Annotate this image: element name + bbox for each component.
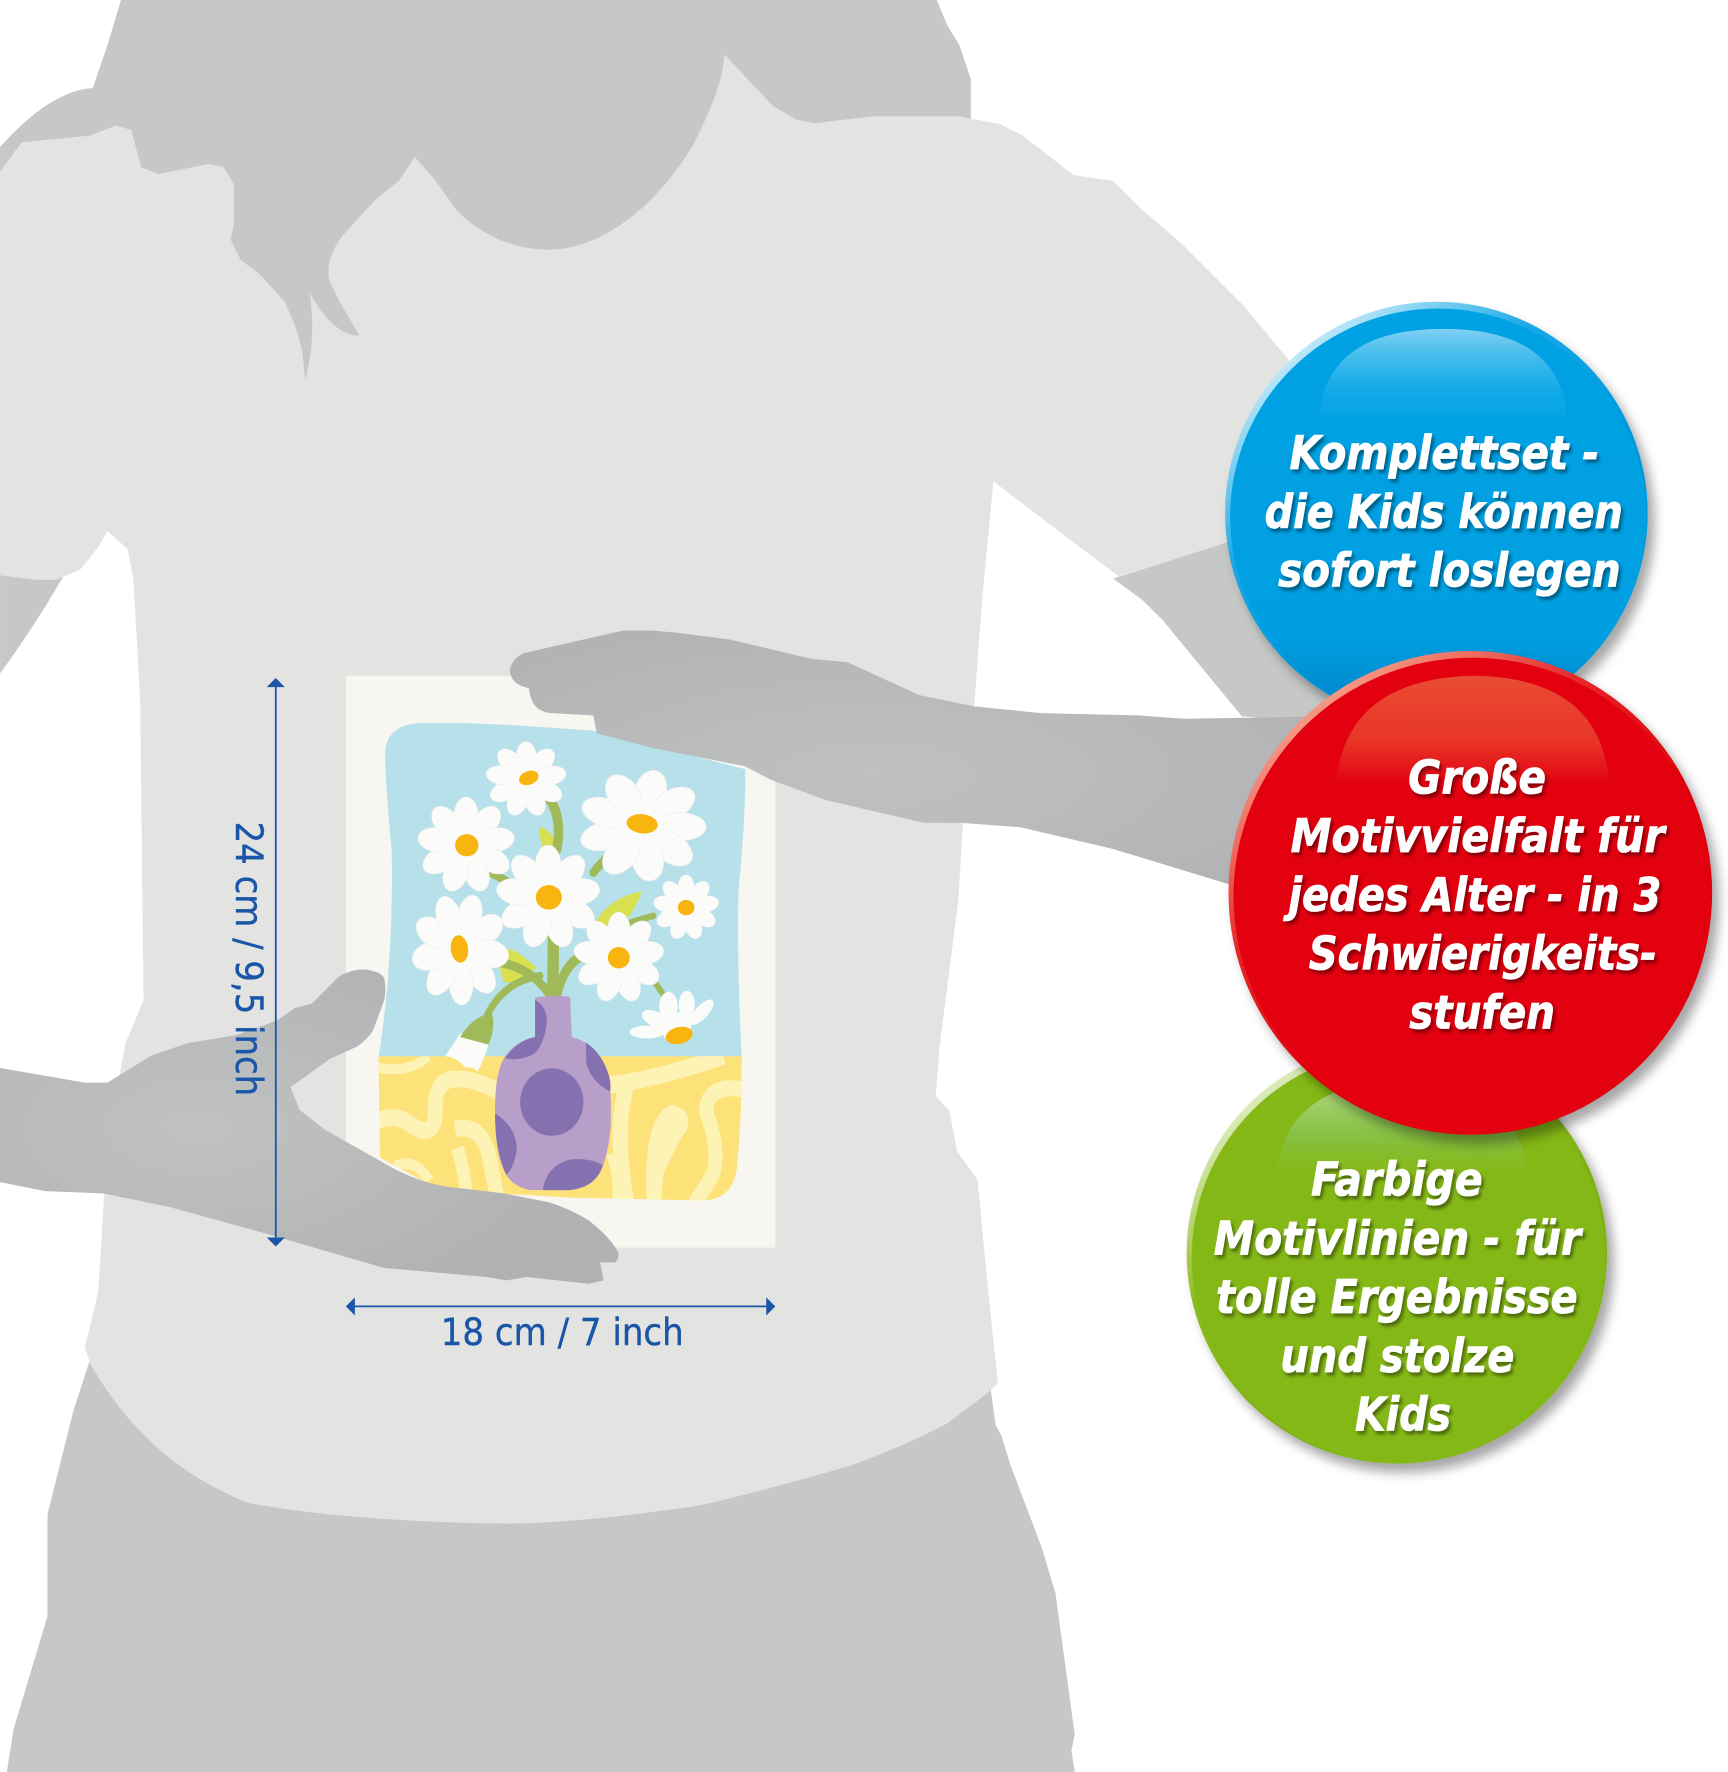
badge text: green: tolle Ergebnisse [1216, 1270, 1578, 1324]
painting: daisy small right [652, 875, 720, 941]
painting: sky background [378, 723, 745, 1058]
painting: daisy lower centre [572, 912, 666, 1005]
product card [346, 676, 775, 1248]
badge gloss: blue [1319, 329, 1567, 420]
badge text: red: Motivvielfalt für [1291, 809, 1667, 863]
badge: blue [1225, 302, 1648, 724]
badge text: red: Große [1408, 750, 1546, 804]
badge text: red: jedes Alter - in 3 [1283, 868, 1661, 922]
badge text: blue [1265, 426, 1623, 598]
silhouette: rear right arm [1113, 540, 1345, 723]
painting: daisy left [416, 797, 516, 895]
badge: red [1228, 651, 1712, 1135]
painting: drooping daisy [629, 991, 717, 1046]
painting: stems and leaves [483, 794, 663, 1016]
painting: daisy lower left [397, 878, 523, 1021]
badge: green [1187, 1043, 1607, 1463]
badge text: green: Farbige [1311, 1153, 1483, 1207]
badge text: blue: die Kids können [1265, 485, 1623, 539]
silhouette: t-shirt [0, 54, 1300, 1524]
badge text: green [1214, 1153, 1584, 1442]
painting: daisy top [485, 742, 568, 818]
painting: daisy centre [494, 845, 602, 951]
badge text: blue: sofort loslegen [1278, 544, 1621, 598]
silhouette: lower left hand and arm [0, 969, 618, 1284]
silhouette: trousers [7, 1362, 1075, 1772]
badge text: red [1283, 750, 1667, 1039]
painting: flower bud [445, 1013, 493, 1071]
silhouette: upper right hand and arm [510, 631, 1322, 893]
silhouette: hair and back of head [0, 0, 971, 384]
badge text: blue: Komplettset - [1289, 426, 1599, 480]
painting: daisy right [564, 759, 720, 893]
badge text: green: und stolze [1280, 1329, 1514, 1383]
dimension arrow: height [267, 678, 285, 1247]
dimension label: width: 18 cm / 7 inch [441, 1310, 684, 1354]
dimension label: height: 24 cm / 9,5 inch [227, 822, 271, 1096]
dimension arrow: width [346, 1297, 775, 1315]
badge gloss: red [1336, 676, 1609, 785]
badge text: red: stufen [1409, 985, 1555, 1039]
badge text: green: Kids [1355, 1388, 1451, 1442]
painting: yellow table with waves [373, 1056, 743, 1204]
painting: daisies in a purple vase [373, 723, 745, 1204]
silhouette: rear left arm [0, 571, 63, 674]
badge text: green: Motivlinien - für [1214, 1211, 1584, 1265]
badge gloss: green [1277, 1079, 1528, 1175]
painting: vase [495, 996, 611, 1190]
badge text: red: Schwierigkeits- [1309, 927, 1657, 981]
